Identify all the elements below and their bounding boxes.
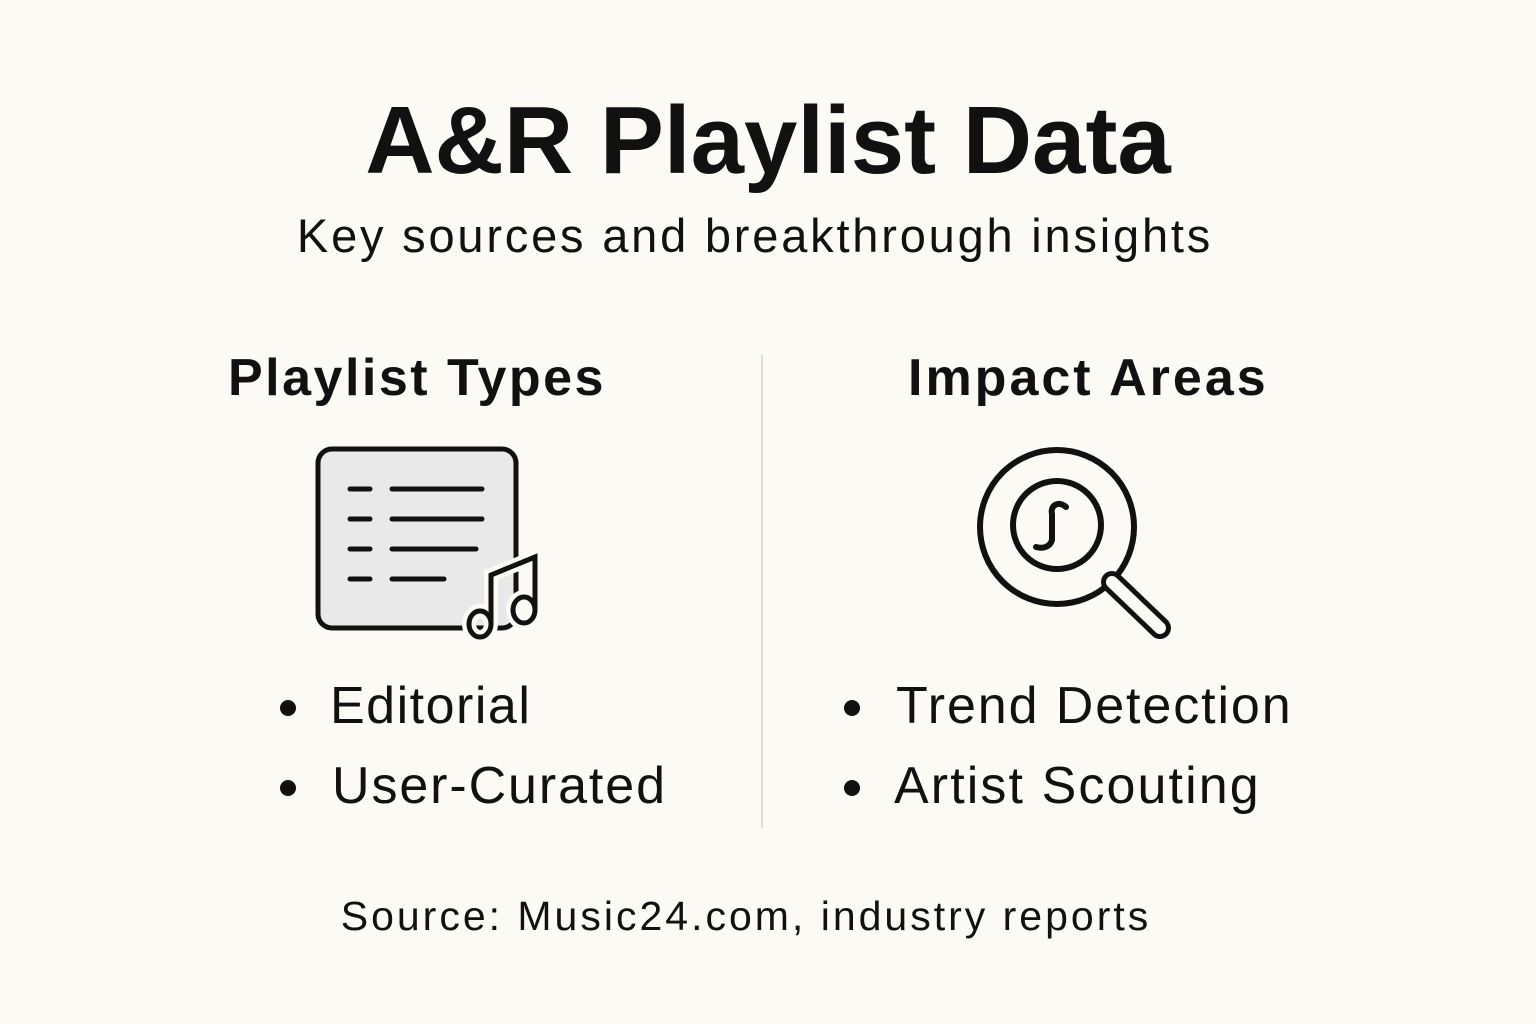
icon: magnifier (977, 447, 1171, 639)
title: A&R Playlist Data (365, 87, 1171, 194)
divider (761, 355, 763, 828)
bullet list: impact areas (844, 677, 1293, 815)
bullet list: playlist types (280, 677, 667, 815)
heading: impact areas: Impact Areas (908, 349, 1269, 407)
heading: playlist types: Playlist Types (228, 349, 606, 407)
bullet list: impact areas: Artist Scouting (894, 757, 1261, 815)
bullet list: impact areas: Trend Detection (896, 677, 1293, 735)
bullet list: playlist types: User-Curated (332, 757, 667, 815)
source: Source: Music24.com, industry reports (341, 893, 1151, 939)
icon: playlist (316, 446, 538, 640)
bullet list: playlist types: Editorial (330, 677, 531, 735)
subtitle: Key sources and breakthrough insights (297, 209, 1213, 262)
